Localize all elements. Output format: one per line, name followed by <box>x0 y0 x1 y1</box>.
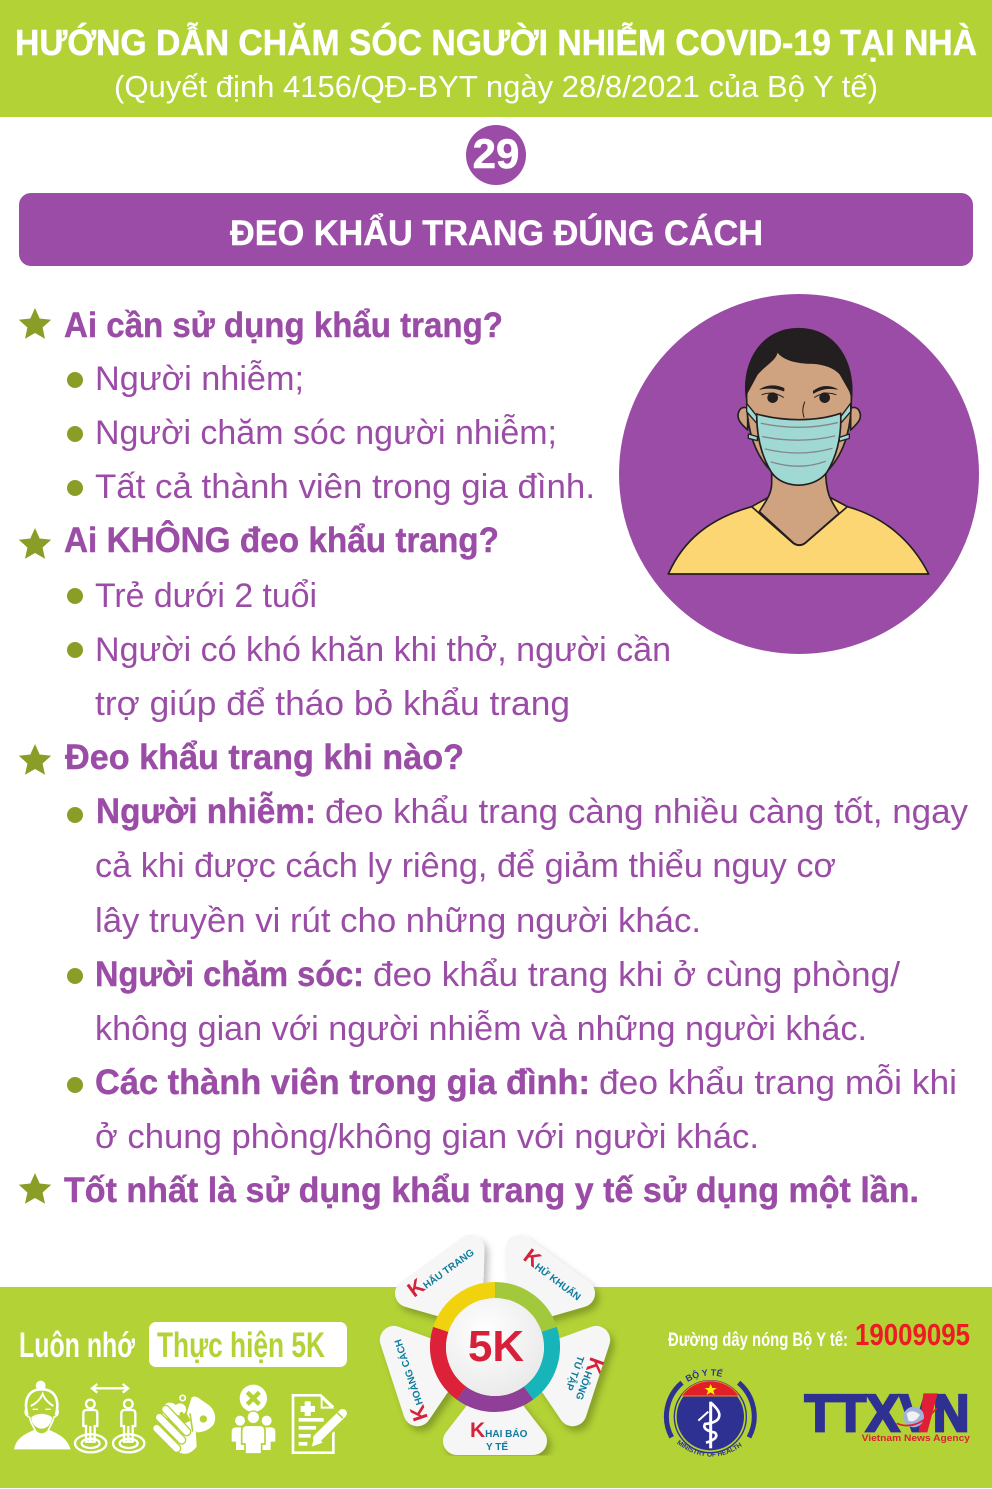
logo: Ministry of Health <box>664 1368 757 1457</box>
petal: khử khuẩn <box>498 1245 588 1322</box>
number badge: 29 <box>473 130 519 177</box>
question 2: who should not wear masks: trợ giúp để tháo bỏ khẩu trang <box>95 685 570 723</box>
icon: washing hands <box>157 1395 215 1454</box>
petal: khử khuẩn: KHỬ KHUẨN <box>519 1245 588 1305</box>
petal: không tụ tập <box>538 1329 608 1412</box>
petal: không tụ tập: KHÔNG <box>571 1354 608 1405</box>
question 1: who should use masks: Người chăm sóc người nhiễm; <box>95 414 557 452</box>
icon: star <box>19 744 51 775</box>
question 3: when to wear masks: đeo khẩu trang mỗi khi <box>599 1064 957 1102</box>
question 2: who should not wear masks: Trẻ dưới 2 tuổi <box>95 577 317 615</box>
subtitle: (Quyết định 4156/QĐ-BYT ngày 28/8/2021 của Bộ Y tế) <box>114 69 878 104</box>
petal: khẩu trang <box>403 1239 492 1322</box>
5K icons row <box>14 1381 343 1454</box>
icon: health declaration form <box>293 1395 343 1453</box>
logo: TTXVN: TTXVN <box>805 1385 969 1443</box>
petal: khai báo y tế <box>457 1405 533 1453</box>
logo: Ministry of Health: MINISTRY OF HEALTH <box>677 1440 742 1457</box>
icon: star <box>19 528 51 559</box>
petal: khẩu trang: KHẨU TRANG <box>403 1239 478 1302</box>
question 1: who should use masks: Ai cần sử dụng khẩu trang? <box>64 306 503 345</box>
logo: TTXVN: Vietnam News Agency <box>862 1433 971 1443</box>
section banner: ĐEO KHẨU TRANG ĐÚNG CÁCH <box>230 213 763 253</box>
illustration: person wearing mask <box>619 294 979 654</box>
5K reminder heading: Luôn nhớ <box>19 1326 135 1365</box>
question 3: when to wear masks: đeo khẩu trang khi ở cùng phòng/ <box>373 956 901 994</box>
section banner <box>19 193 973 266</box>
hotline <box>668 1317 970 1352</box>
footer band <box>0 1287 992 1488</box>
question 1: who should use masks: Tất cả thành viên trong gia đình. <box>95 468 595 506</box>
question 2: who should not wear masks: Ai KHÔNG đeo khẩu trang? <box>64 520 499 560</box>
petal: khai báo y tế: Y TẾ <box>486 1440 508 1453</box>
icon: woman with mask <box>14 1381 71 1449</box>
5K reminder heading <box>19 1322 347 1367</box>
ring <box>438 1290 552 1404</box>
number badge <box>466 125 526 185</box>
question 1: who should use masks: Người nhiễm; <box>95 360 304 398</box>
petal: khai báo y tế: KHAI BÁO <box>470 1419 528 1442</box>
question 3: when to wear masks <box>19 738 968 1156</box>
petal: khoảng cách <box>384 1329 452 1424</box>
hotline: Đường dây nóng Bộ Y tế: <box>668 1330 848 1351</box>
5K petal diagram <box>384 1239 608 1453</box>
question 2: who should not wear masks: Người có khó khăn khi thở, người cần <box>95 631 671 669</box>
5K petal diagram: 5K <box>468 1322 524 1371</box>
logo: Ministry of Health: BỘ Y TẾ <box>685 1368 723 1382</box>
header band <box>0 0 992 117</box>
hotline: 19009095 <box>855 1317 970 1352</box>
question 3: when to wear masks: Người nhiễm: <box>96 791 316 831</box>
petal: khoảng cách: KHOẢNG CÁCH <box>384 1337 433 1424</box>
question 3: when to wear masks: không gian với người nhiễm và những người khác. <box>95 1010 867 1048</box>
icon: star <box>19 1173 51 1204</box>
question 1: who should use masks <box>19 306 595 506</box>
icon: star <box>19 308 51 339</box>
question 3: when to wear masks: đeo khẩu trang càng nhiều càng tốt, ngay <box>325 793 968 831</box>
question 3: when to wear masks: ở chung phòng/không gian với người khác. <box>95 1118 759 1156</box>
question 2: who should not wear masks <box>19 520 671 723</box>
question 3: when to wear masks: cả khi được cách ly riêng, để giảm thiểu nguy cơ <box>95 847 836 885</box>
5K reminder heading: Thực hiện 5K <box>157 1326 325 1365</box>
question 3: when to wear masks: Người chăm sóc: <box>95 955 364 994</box>
question 3: when to wear masks: lây truyền vi rút cho những người khác. <box>95 902 701 940</box>
petal: không tụ tập: TÚ TẬP <box>563 1354 587 1393</box>
icon: distance arrow and two people <box>75 1384 144 1452</box>
question 3: when to wear masks: Các thành viên trong gia đình: <box>95 1063 590 1102</box>
question 3: when to wear masks: Đeo khẩu trang khi nào? <box>65 738 464 777</box>
recommendation line: Tốt nhất là sử dụng khẩu trang y tế sử dụng một lần. <box>64 1171 919 1210</box>
icon: no gatherings <box>232 1385 275 1454</box>
